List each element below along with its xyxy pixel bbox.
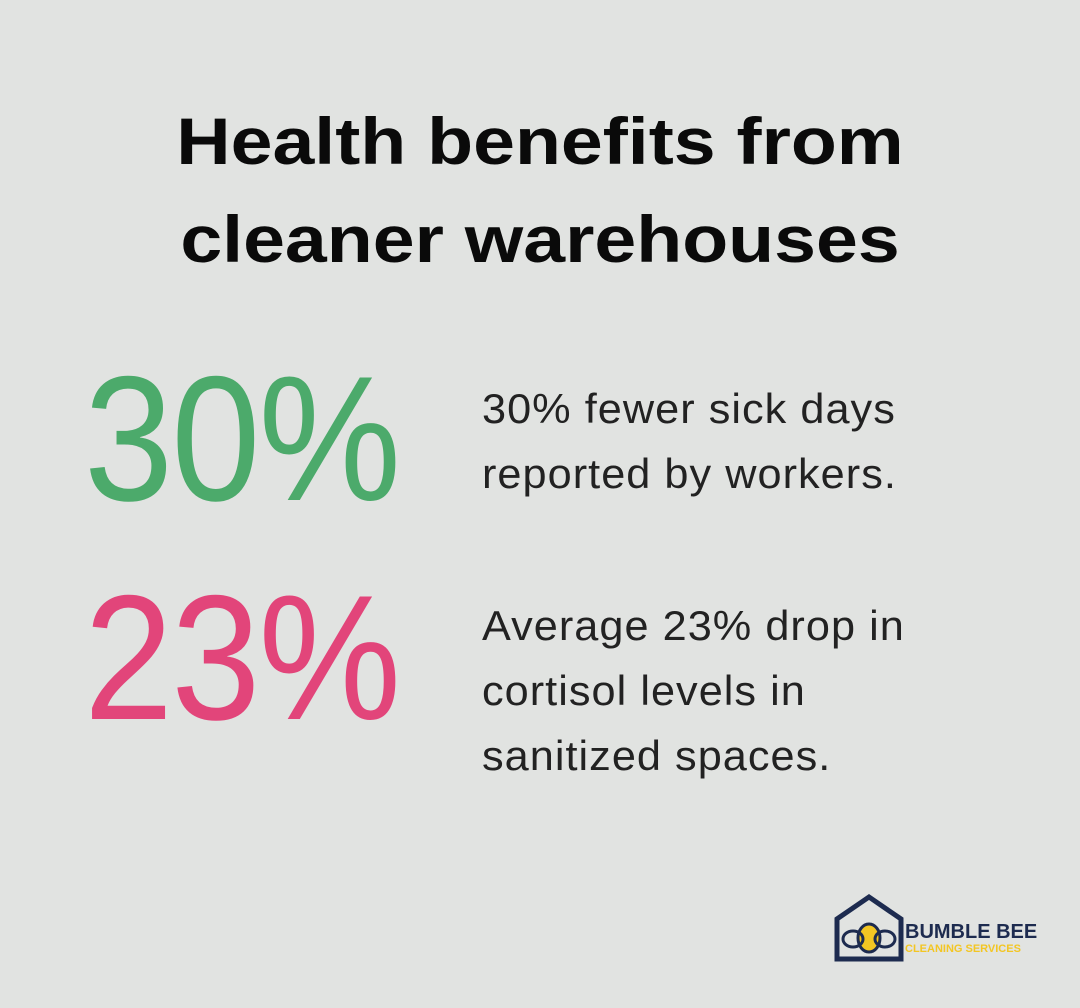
stat: 23%: 23% [84, 558, 399, 757]
stat: 30%: 30% [84, 339, 399, 538]
logo [834, 894, 1037, 962]
title: cleaner warehouses [180, 202, 900, 276]
text: 23% description: sanitized spaces. [482, 732, 831, 779]
text: 23% description: Average 23% drop in [482, 602, 905, 649]
text: 23% description [482, 602, 905, 779]
logo: BUMBLE BEE [905, 921, 1037, 943]
text: 30% description: reported by workers. [482, 450, 897, 497]
text: 30% description [482, 385, 897, 497]
text: 30% description: 30% fewer sick days [482, 385, 896, 432]
logo: CLEANING SERVICES [905, 943, 1021, 955]
title [176, 104, 904, 276]
text: 23% description: cortisol levels in [482, 667, 806, 714]
title: Health benefits from [176, 104, 904, 178]
